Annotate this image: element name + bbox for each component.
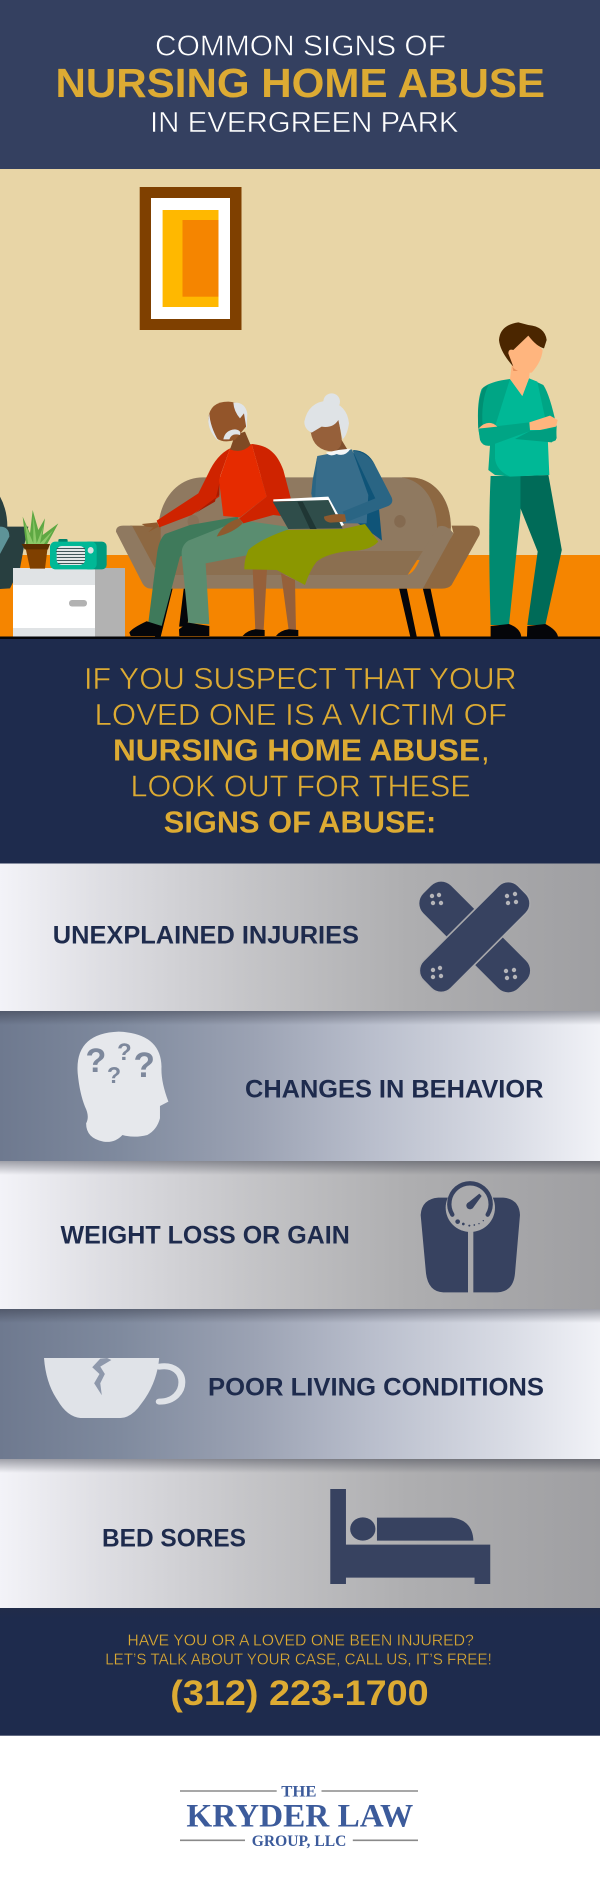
bedside table (13, 568, 125, 637)
icon: person in bed (330, 1489, 490, 1584)
intro comma: , (481, 733, 490, 768)
icon: crossed bandages (414, 876, 536, 998)
intro panel (0, 639, 600, 864)
icon: cracked cup (44, 1358, 182, 1418)
band: bed sores (0, 1459, 600, 1608)
cta line 1: HAVE YOU OR A LOVED ONE BEEN INJURED? (127, 1632, 474, 1649)
intro line 4: LOOK OUT FOR THESE (130, 769, 471, 804)
older man on sofa (129, 402, 292, 636)
label: BED SORES (102, 1526, 246, 1553)
logo: The Kryder Law Group, LLC: THE (281, 1784, 316, 1801)
phone number: (312) 223-1700 (170, 1674, 429, 1713)
sofa (116, 477, 480, 637)
sofa legs (155, 589, 440, 637)
logo: The Kryder Law Group, LLC (180, 1784, 418, 1850)
label: CHANGES IN BEHAVIOR (245, 1077, 544, 1104)
header panel (0, 0, 600, 169)
icon: bathroom scale (421, 1183, 520, 1292)
label: UNEXPLAINED INJURIES (53, 923, 359, 950)
band: poor living conditions (0, 1309, 600, 1459)
footer call-to-action panel (0, 1608, 600, 1736)
intro line 1: IF YOU SUSPECT THAT YOUR (84, 661, 517, 696)
intro line 3: NURSING HOME ABUSE (113, 733, 480, 768)
illustration panel: room scene (0, 169, 600, 637)
icon: head with question marks: ? (107, 1062, 121, 1088)
icon: head with question marks (77, 1032, 168, 1142)
logo: The Kryder Law Group, LLC: KRYDER LAW (186, 1799, 413, 1835)
label: WEIGHT LOSS OR GAIN (60, 1223, 350, 1250)
title line 1: COMMON SIGNS OF (155, 31, 446, 63)
floor line (0, 636, 600, 639)
icon: head with question marks: ? (134, 1046, 155, 1085)
icon: head with question marks: ? (117, 1039, 132, 1066)
intro line 5: SIGNS OF ABUSE: (164, 805, 436, 840)
cta line 2: LET’S TALK ABOUT YOUR CASE, CALL US, IT’S FREE! (105, 1651, 492, 1668)
nurse standing (478, 322, 562, 637)
logo: The Kryder Law Group, LLC: GROUP, LLC (252, 1833, 346, 1850)
title line 3: IN EVERGREEN PARK (150, 107, 459, 139)
band: unexplained injuries (0, 864, 600, 1011)
band: weight loss or gain (0, 1161, 600, 1309)
older woman reading on sofa (243, 393, 392, 636)
framed picture (140, 187, 242, 330)
radio (50, 539, 107, 569)
intro line 2: LOVED ONE IS A VICTIM OF (94, 697, 507, 732)
icon: head with question marks: ? (86, 1042, 106, 1080)
potted plant (22, 510, 58, 569)
band: changes in behavior (0, 1011, 600, 1161)
dark armchair at left edge (0, 497, 28, 589)
title line 2: NURSING HOME ABUSE (56, 60, 545, 106)
label: POOR LIVING CONDITIONS (208, 1375, 544, 1402)
